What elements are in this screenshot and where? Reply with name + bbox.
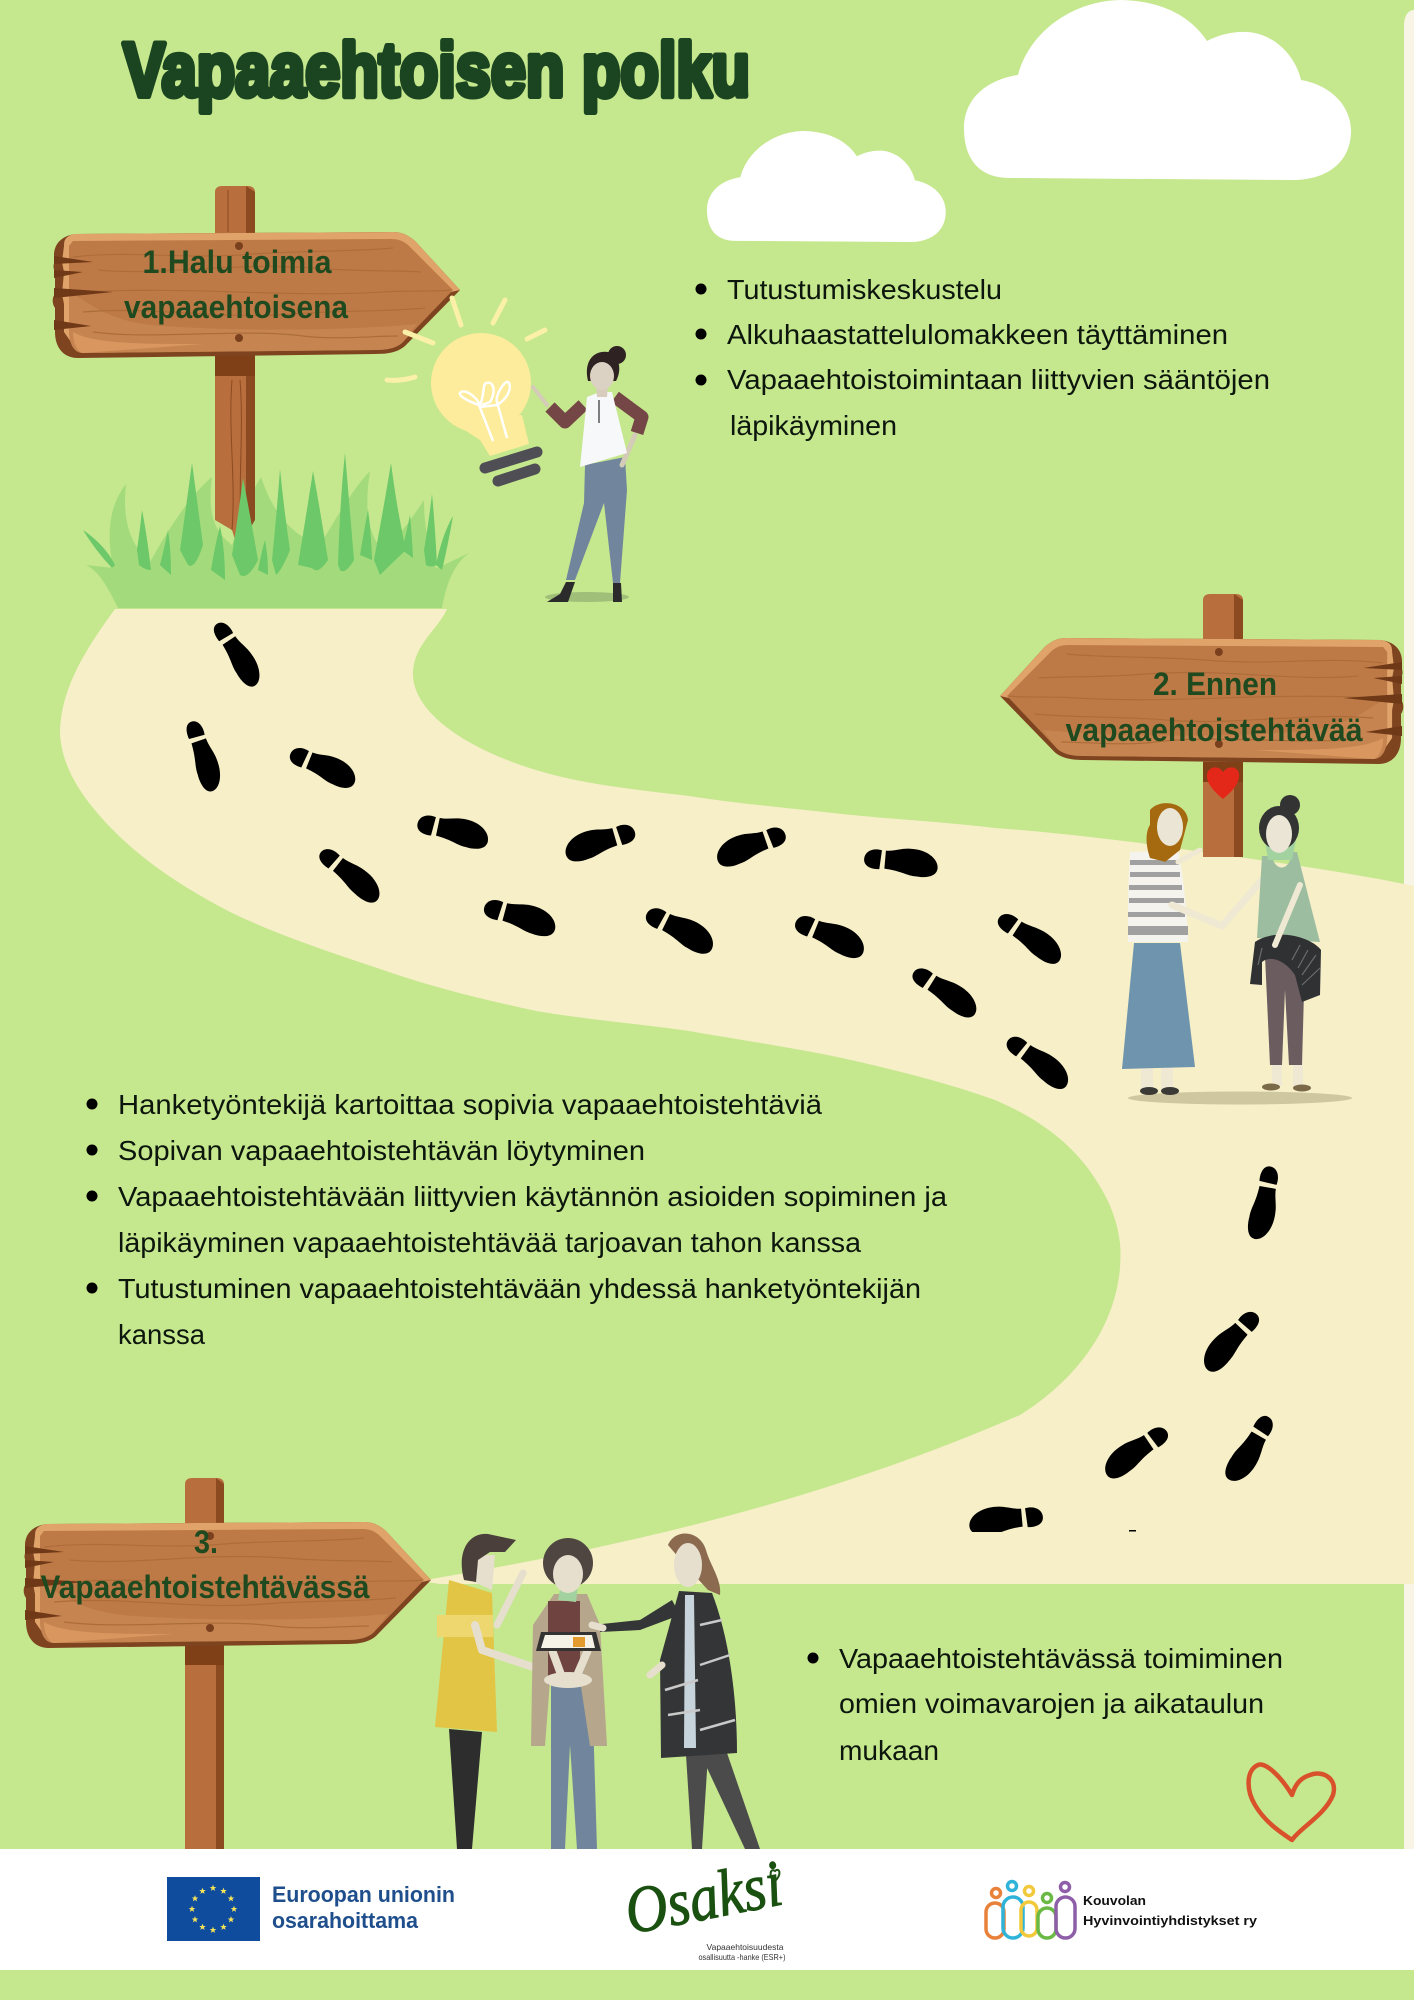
right edge strip <box>1404 10 1414 1849</box>
Kouvolan Hyvinvointiyhdistykset logo: Hyvinvointiyhdistykset ry <box>1083 1913 1258 1928</box>
bullet list: stage 2 <box>86 1089 947 1350</box>
signpost 2 <box>1000 594 1403 857</box>
sign 3 label: 3. <box>194 1524 218 1560</box>
footprints trail <box>181 617 1283 1536</box>
Osaksi logo: Osaksi <box>619 1847 788 1949</box>
Osaksi logo: osallisuutta -hanke (ESR+) <box>698 1952 786 1962</box>
winding path <box>60 609 1414 1584</box>
signpost 2: vapaaehtoistehtävää <box>1066 712 1363 748</box>
bullet list: stage 1: Tutustumiskeskustelu <box>727 274 1002 305</box>
sign 1 label: 1.Halu toimia <box>142 244 332 280</box>
bullet list: stage 1 <box>696 274 1270 441</box>
bullet list: stage 2: kanssa <box>118 1319 205 1350</box>
icon: red heart on post <box>1207 767 1239 799</box>
grass blades <box>83 453 453 580</box>
bullet list: stage 1: Alkuhaastattelulomakkeen täyttäminen <box>727 319 1228 350</box>
Kouvolan Hyvinvointiyhdistykset logo <box>986 1882 1258 1938</box>
small cloud <box>707 131 946 242</box>
EU logo <box>167 1877 455 1941</box>
footer band <box>0 1849 1414 1970</box>
sign 2 label: 2. Ennen <box>1153 666 1277 702</box>
bulb rays <box>387 298 545 380</box>
two women talking <box>1122 795 1352 1104</box>
bullet list: stage 2: läpikäyminen vapaaehtoistehtävää tarjoavan tahon kanssa <box>118 1227 861 1258</box>
icon: lightbulb <box>387 298 545 481</box>
title: Vapaaehtoisen polku <box>123 28 750 113</box>
bullet list: stage 2: Sopivan vapaaehtoistehtävän löytyminen <box>118 1135 645 1166</box>
bullet list: stage 3: omien voimavarojen ja aikataulun <box>839 1688 1264 1719</box>
signpost 1: vapaaehtoisena <box>124 289 348 325</box>
icon: heart outline <box>1249 1765 1334 1840</box>
bullet list: stage 2: Tutustuminen vapaaehtoistehtävään yhdessä hanketyöntekijän <box>118 1273 921 1304</box>
EU text: Euroopan unionin <box>272 1882 455 1907</box>
bullet list: stage 2: Hanketyöntekijä kartoittaa sopivia vapaaehtoistehtäviä <box>118 1089 822 1120</box>
bullet list: stage 3 <box>808 1643 1283 1766</box>
large cloud <box>964 0 1351 180</box>
signpost 1 <box>53 186 460 552</box>
woman with lightbulb <box>533 346 642 602</box>
Osaksi logo: Vapaaehtoisuudesta <box>707 1942 784 1952</box>
bullet list: stage 3: mukaan <box>839 1735 939 1766</box>
bullet list: stage 2: Vapaaehtoistehtävään liittyvien käytännön asioiden sopiminen ja <box>118 1181 947 1212</box>
bullet list: stage 1: Vapaaehtoistoimintaan liittyvien sääntöjen <box>727 364 1270 395</box>
signpost 3 <box>24 1478 431 1849</box>
EU logo: osarahoittama <box>272 1908 419 1933</box>
bullet list: stage 1: läpikäyminen <box>730 410 897 441</box>
bullet list: stage 3: Vapaaehtoistehtävässä toimiminen <box>839 1643 1283 1674</box>
signpost 3: Vapaaehtoistehtävässä <box>40 1569 370 1605</box>
grass tuft <box>86 471 469 608</box>
group of three people <box>435 1534 760 1849</box>
Kouvolan Hyvinvointiyhdistykset logo: Kouvolan <box>1083 1893 1146 1908</box>
